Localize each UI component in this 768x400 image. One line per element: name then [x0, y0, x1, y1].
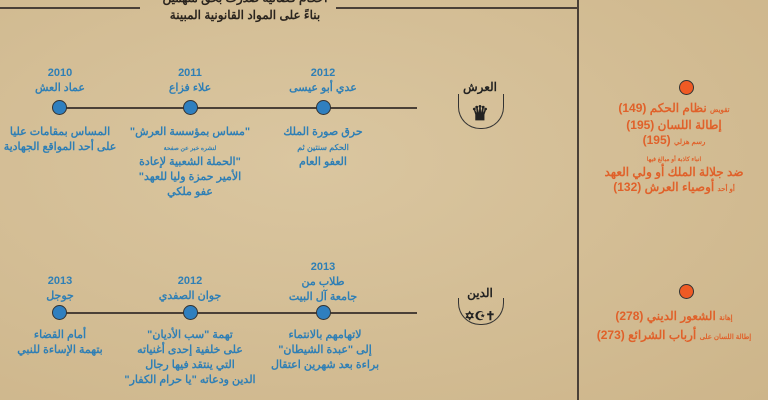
- event 2010: 2010: [48, 67, 72, 79]
- title: بناءً على المواد القانونية المبينة: [170, 8, 320, 22]
- category: throne icon: ♛: [471, 103, 489, 125]
- event 2013 students: [289, 261, 357, 303]
- legal articles: throne: تقويض نظام الحكم (149): [618, 101, 730, 115]
- legal articles: throne: انباء كاذبة أو مبالغ فيها: [647, 157, 701, 163]
- event 2013 google: جوجل: [46, 290, 74, 302]
- legal articles: throne: رسم هزلي (195): [643, 133, 705, 147]
- event 2013 google: 2013: [48, 275, 72, 287]
- timeline: religion: على خلفية إحدى أغنياته: [137, 344, 243, 356]
- timeline: religion: التي ينتقد فيها رجال: [145, 359, 235, 371]
- event 2013 students: جامعة آل البيت: [289, 291, 357, 303]
- event 2013 google: [46, 275, 74, 302]
- timeline: religion: تهمة "سب الأديان": [147, 329, 233, 341]
- timeline: religion: أمام القضاء: [34, 329, 86, 341]
- event 2012: [289, 67, 357, 94]
- event 2012 jowan: 2012: [178, 275, 202, 287]
- legal articles: throne: إطالة اللسان (195): [626, 118, 722, 132]
- timeline: religion: بتهمة الإساءة للنبي: [17, 344, 103, 356]
- timeline: throne: على أحد المواقع الجهادية: [4, 141, 116, 153]
- category: religion icon: الدين: [467, 286, 493, 300]
- timeline: throne: العفو العام: [299, 156, 347, 168]
- event 2011: علاء فزاع: [169, 82, 211, 94]
- event 2010: عماد العش: [35, 82, 85, 94]
- timeline: throne: حرق صورة الملك: [283, 126, 363, 138]
- legal articles: religion: إطالة اللسان على أرباب الشرائع (273): [597, 328, 751, 342]
- legal articles: throne: أو أحد أوصياء العرش (132): [613, 180, 735, 194]
- event 2012 jowan: [159, 275, 221, 302]
- event 2013 students: 2013: [311, 261, 335, 273]
- event 2012 jowan: جوان الصفدي: [159, 290, 221, 302]
- timeline: religion: [17, 261, 504, 386]
- timeline: throne: "الحملة الشعبية لإعادة: [139, 156, 241, 168]
- legal articles: throne: ضد جلالة الملك أو ولي العهد: [604, 165, 744, 179]
- timeline: religion: براءة بعد شهرين اعتقال: [271, 359, 379, 371]
- timeline: throne: عفو ملكي: [167, 186, 213, 198]
- timeline: throne: الحكم سنتين ثم: [297, 143, 349, 152]
- event 2012: 2012: [311, 67, 335, 79]
- timeline: throne: [4, 67, 504, 198]
- timeline: religion: الدين ودعاته "يا حرام الكفار": [124, 374, 256, 386]
- event 2011: 2011: [178, 67, 202, 79]
- timeline: religion: لاتهامهم بالانتماء: [288, 329, 362, 341]
- legal articles: throne: [604, 80, 744, 194]
- category: religion icon: ✝☪✡: [465, 309, 495, 323]
- title: [163, 0, 327, 22]
- category: throne icon: العرش: [463, 80, 497, 94]
- category: religion icon: [458, 286, 504, 325]
- category: throne icon: [458, 80, 504, 129]
- timeline: throne: لنشره خبر عن صفحة: [164, 146, 216, 152]
- event 2013 students: طلاب من: [302, 276, 344, 288]
- event 2010: [35, 67, 85, 94]
- event 2012: عدي أبو عيسى: [289, 82, 357, 94]
- event 2011: [169, 67, 211, 94]
- timeline: throne: المساس بمقامات عليا: [10, 126, 110, 138]
- legal articles: religion: إهانة الشعور الديني (278): [615, 309, 733, 323]
- timeline: religion: إلى "عبدة الشيطان": [278, 344, 372, 356]
- timeline: throne: "مساس بمؤسسة العرش": [130, 126, 250, 138]
- legal articles: religion: [597, 284, 751, 342]
- timeline: throne: الأمير حمزة وليا للعهد": [139, 171, 241, 183]
